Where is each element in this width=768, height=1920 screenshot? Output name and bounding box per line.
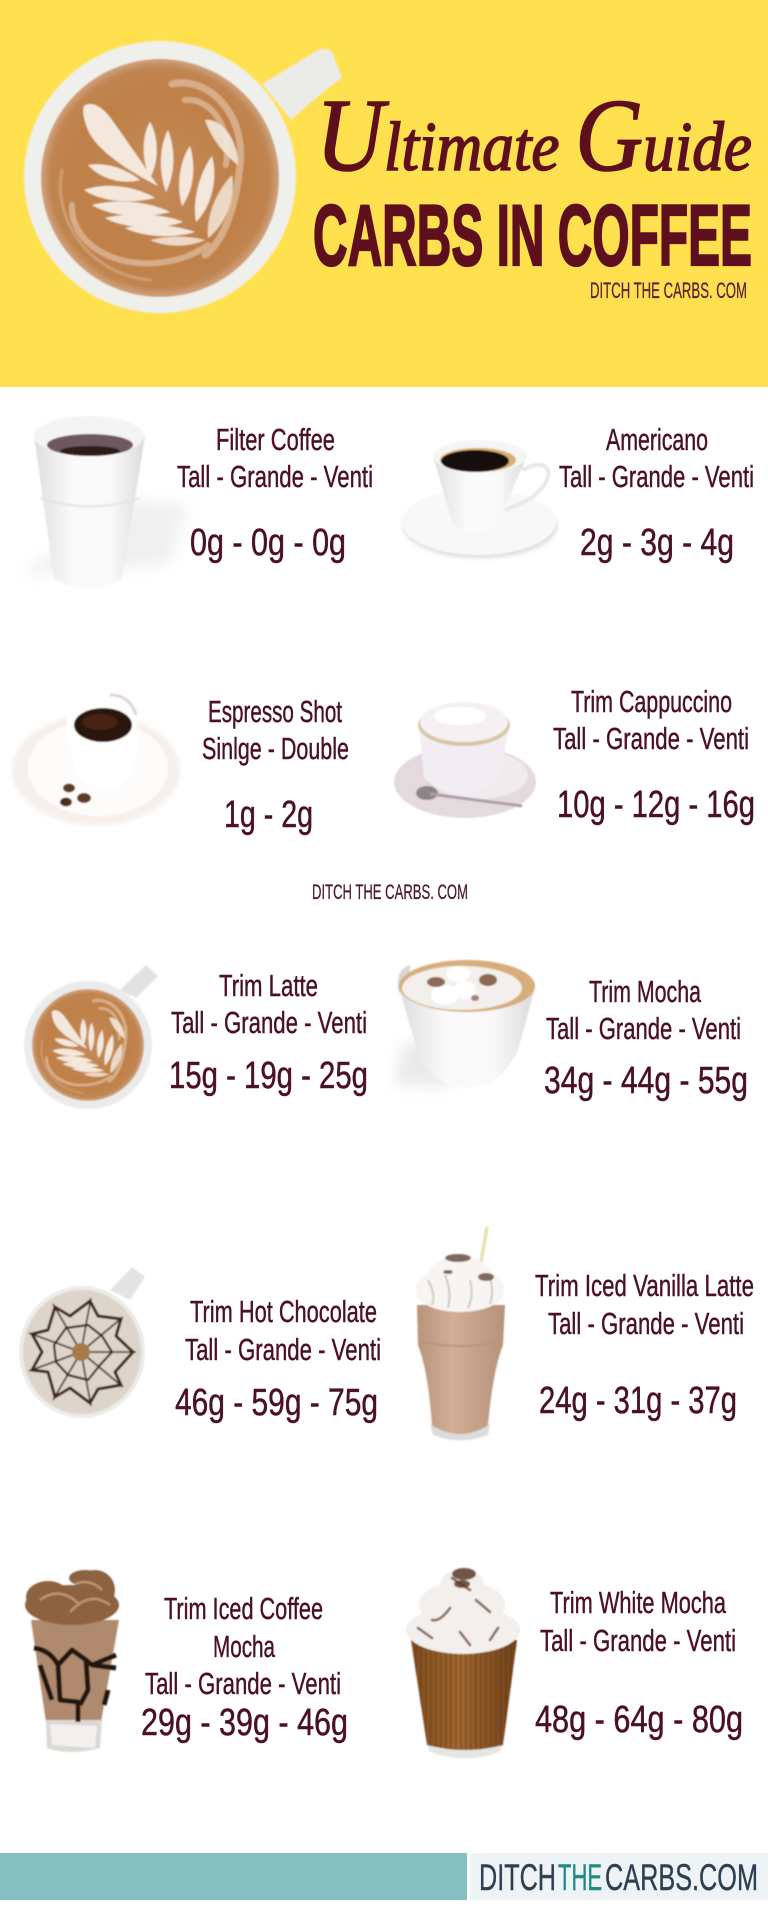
icon: mug with chocolate flakes and marshmallows xyxy=(395,960,535,1088)
panel: trim mocha xyxy=(395,960,748,1102)
label: trim hot chocolate: Trim Hot Chocolate xyxy=(190,1294,377,1329)
carb values: 46g - 59g - 75g xyxy=(175,1382,378,1424)
carb values: 15g - 19g - 25g xyxy=(169,1055,368,1097)
label: filter coffee: Filter Coffee xyxy=(216,422,335,457)
panel: espresso shot xyxy=(12,694,349,836)
panel: trim white mocha xyxy=(406,1568,743,1758)
icon: iced latte with cream and straw xyxy=(416,1227,505,1440)
title: Ultimate Guide: Ultimate Guide xyxy=(316,78,752,193)
carb values: 1g - 2g xyxy=(224,794,313,836)
icon: espresso cup on saucer xyxy=(402,440,557,558)
panel: filter coffee xyxy=(20,416,373,589)
icon: latte cup with handle xyxy=(24,41,342,313)
panel: americano xyxy=(402,422,754,564)
footer banner xyxy=(0,1853,768,1900)
panel: trim hot chocolate xyxy=(19,1267,381,1424)
credit: ditch the carbs centre: DITCH THE CARBS. COM xyxy=(312,881,468,904)
label: americano: Americano xyxy=(606,422,708,457)
icon: hot chocolate with spider web art xyxy=(19,1267,145,1418)
panel: trim iced vanilla latte xyxy=(416,1227,754,1440)
label: trim iced coffee mocha xyxy=(164,1591,323,1664)
panel: trim latte xyxy=(24,965,368,1109)
label: trim iced coffee mocha: Trim Iced Coffee xyxy=(164,1591,323,1626)
footer website xyxy=(479,1857,758,1898)
sizes: Tall - Grande - Venti xyxy=(185,1332,381,1367)
label: espresso shot: Espresso Shot xyxy=(208,694,342,729)
label: trim latte: Trim Latte xyxy=(219,968,318,1003)
icon: cappuccino with spoon xyxy=(394,702,536,818)
carb values: 29g - 39g - 46g xyxy=(141,1702,348,1744)
sizes: Tall - Grande - Venti xyxy=(171,1005,367,1040)
panel: trim iced coffee mocha xyxy=(25,1570,348,1752)
panel: trim cappuccino xyxy=(394,684,755,826)
footer website: THE xyxy=(558,1857,602,1898)
sizes: Tall - Grande - Venti xyxy=(177,459,373,494)
header panel xyxy=(0,0,768,387)
sizes: Tall - Grande - Venti xyxy=(145,1666,341,1701)
icon: latte cup from above xyxy=(24,965,158,1109)
sizes: Sinlge - Double xyxy=(202,731,349,766)
carb values: 0g - 0g - 0g xyxy=(190,522,346,564)
label: trim iced coffee mocha: Mocha xyxy=(213,1629,276,1664)
icon: espresso from above with beans xyxy=(12,695,180,826)
footer website: DITCH xyxy=(479,1857,556,1898)
icon: paper cup with whipped cream xyxy=(406,1568,520,1758)
icon: white filter coffee cup xyxy=(20,416,188,589)
icon: iced mocha glass with chocolate syrup xyxy=(25,1570,119,1752)
label: trim mocha: Trim Mocha xyxy=(589,974,702,1009)
